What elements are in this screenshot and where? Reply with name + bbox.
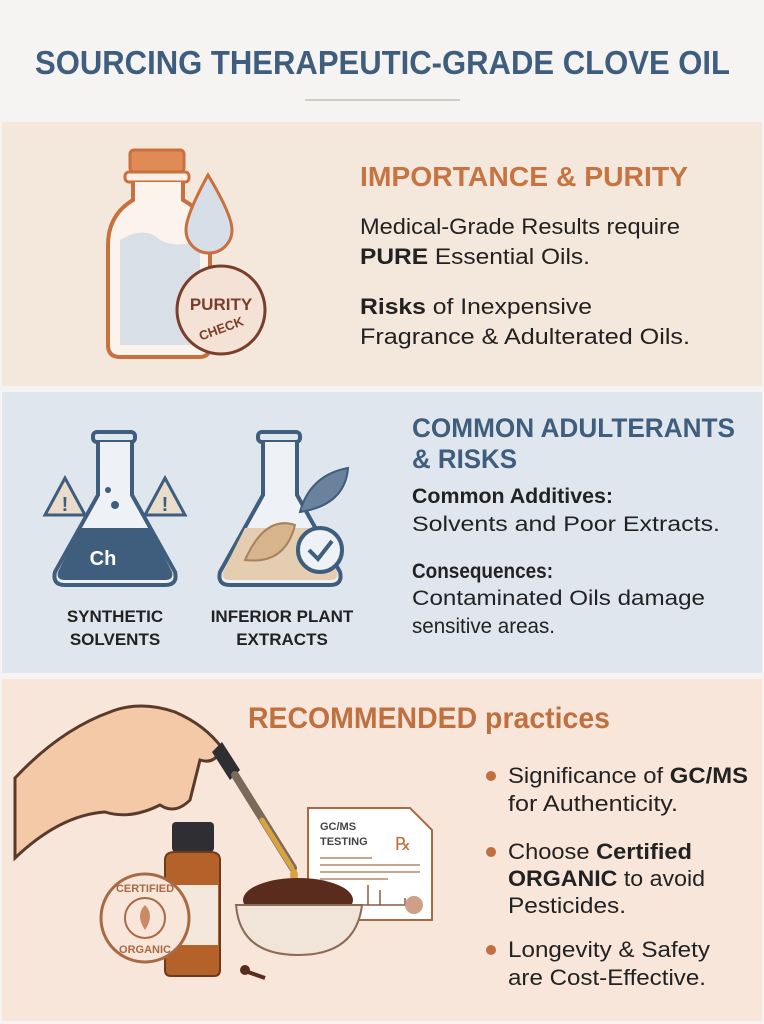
text block: purity: Fragrance & Adulterated Oils. xyxy=(360,324,690,349)
illustration: GC/MS document: GC/MS xyxy=(320,821,356,833)
text block: adulterants: Contaminated Oils damage xyxy=(412,587,705,610)
icon: synthetic solvents flask xyxy=(45,432,185,585)
bullet list: Choose Certified xyxy=(508,839,692,864)
labels: flasks: SOLVENTS xyxy=(70,630,160,649)
text block: purity: PURE Essential Oils. xyxy=(360,244,590,269)
heading: adulterants: COMMON ADULTERANTS xyxy=(412,413,735,443)
icon: bottle with purity check: CHECK xyxy=(197,313,246,343)
icon: synthetic solvents flask: Ch xyxy=(90,548,116,570)
text block: adulterants: sensitive areas. xyxy=(412,615,555,638)
icon: bottle with purity check: PURITY xyxy=(190,295,253,314)
icon: synthetic solvents flask: ! xyxy=(62,494,68,516)
bullet list: ORGANIC to avoid xyxy=(508,866,705,891)
bullet list: Significance of GC/MS xyxy=(508,763,748,788)
icon: certified organic stamp xyxy=(101,874,189,962)
icon: certified organic stamp: CERTIFIED xyxy=(116,883,174,895)
bullet list: for Authenticity. xyxy=(508,791,678,816)
title: SOURCING THERAPEUTIC-GRADE CLOVE OIL xyxy=(35,44,730,81)
text block: adulterants: Solvents and Poor Extracts. xyxy=(412,513,720,536)
icon: synthetic solvents flask: ! xyxy=(162,494,168,516)
heading: recommended: RECOMMENDED practices xyxy=(248,702,610,735)
text block: purity: Risks of Inexpensive xyxy=(360,294,592,319)
panel: importance & purity xyxy=(2,122,762,386)
illustration: hand with dropper xyxy=(15,706,298,881)
heading: adulterants xyxy=(412,413,735,474)
text block: adulterants: Common Additives: xyxy=(412,485,613,508)
heading: importance & purity: IMPORTANCE & PURITY xyxy=(360,161,688,192)
bullet list xyxy=(486,763,748,990)
panel: recommended practices xyxy=(2,679,762,1021)
illustration: GC/MS document: ℞ xyxy=(395,834,411,854)
bullet list: are Cost-Effective. xyxy=(508,965,706,990)
icon: plant extracts flask xyxy=(219,432,348,585)
text block: purity: Medical-Grade Results require xyxy=(360,214,680,239)
bullet list: Pesticides. xyxy=(508,893,626,918)
icon: certified organic stamp: ORGANIC xyxy=(119,944,171,956)
illustration: GC/MS document: TESTING xyxy=(320,836,368,848)
illustration: GC/MS document xyxy=(308,808,432,920)
bullet list: Longevity & Safety xyxy=(508,937,710,962)
labels: flasks: SYNTHETIC xyxy=(67,607,163,626)
labels: flasks: INFERIOR PLANT xyxy=(211,607,354,626)
text block: purity xyxy=(360,214,690,349)
illustration: amber bottle xyxy=(165,822,220,976)
labels: flasks xyxy=(67,607,354,649)
text block: adulterants: Consequences: xyxy=(412,560,553,583)
labels: flasks: EXTRACTS xyxy=(236,630,328,649)
illustration: clove bowl xyxy=(236,878,362,978)
heading: adulterants: & RISKS xyxy=(412,444,517,474)
icon: bottle with purity check xyxy=(108,150,265,357)
text block: adulterants xyxy=(412,485,720,638)
panel: adulterants xyxy=(2,392,762,673)
